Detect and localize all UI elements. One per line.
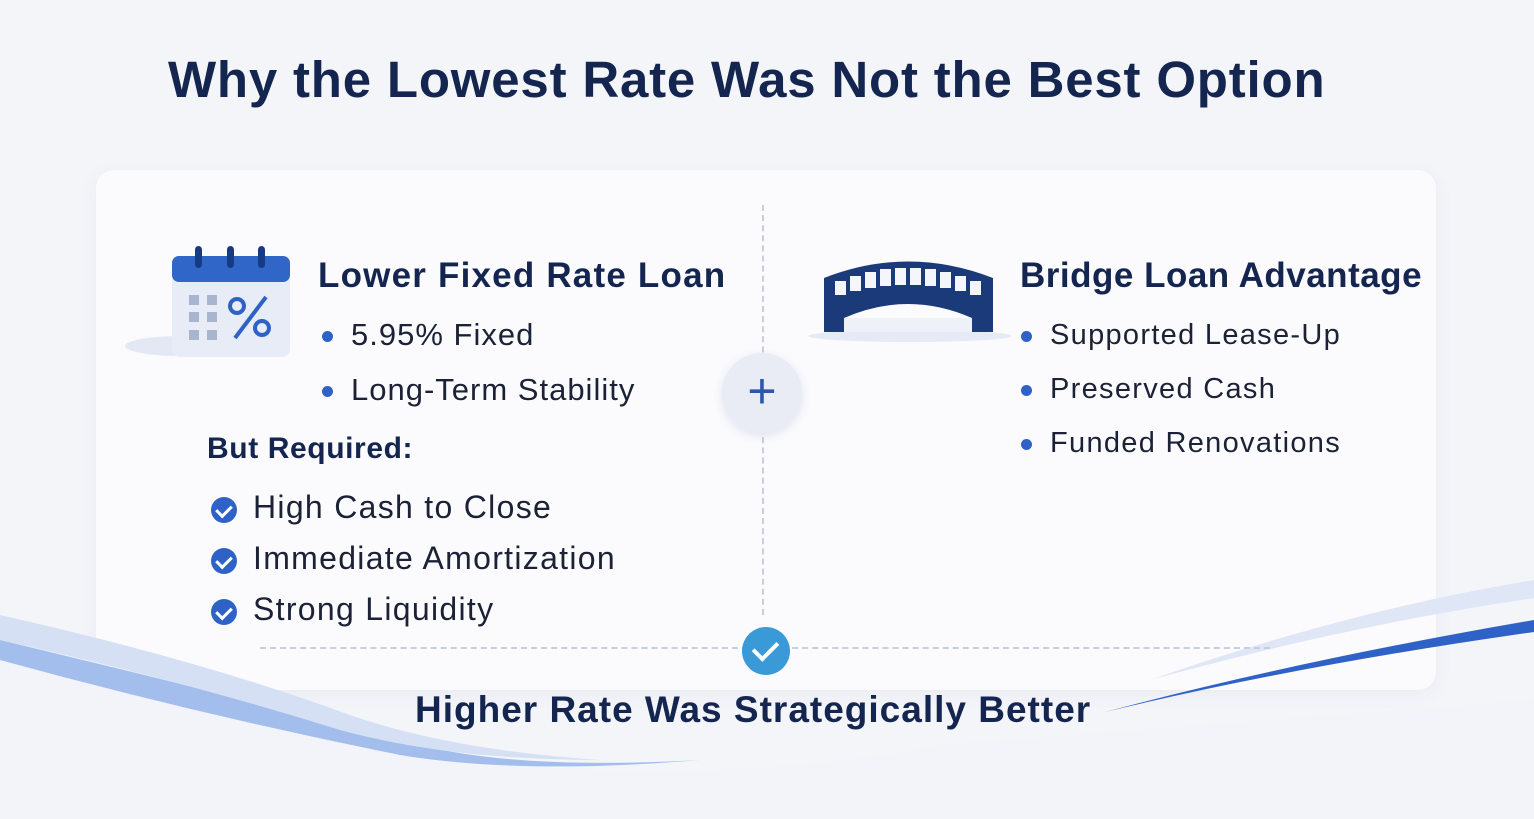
- title: Why the Lowest Rate Was Not the Best Option: [168, 51, 1325, 108]
- list: fixed loan benefits: Long-Term Stability: [351, 372, 635, 407]
- list: bridge benefits: Supported Lease-Up: [1050, 319, 1341, 351]
- horizontal divider: [260, 647, 1270, 649]
- vertical divider: [762, 205, 764, 615]
- icon: plus circle: [722, 353, 802, 433]
- heading: bridge loan advantage: Bridge Loan Advantage: [1020, 256, 1422, 295]
- icon: plus circle: +: [747, 363, 777, 419]
- heading: lower fixed rate loan: Lower Fixed Rate Loan: [318, 256, 726, 295]
- icon: check circle: [742, 627, 790, 675]
- heading: but required: But Required:: [207, 432, 413, 465]
- list: requirements: Strong Liquidity: [253, 591, 494, 627]
- card panel: [96, 170, 1436, 690]
- decorative wave: [0, 580, 1534, 766]
- list: requirements: Immediate Amortization: [253, 540, 616, 576]
- list: requirements: [211, 489, 616, 627]
- icon: bridge: [808, 262, 1012, 342]
- list: fixed loan benefits: [322, 317, 635, 407]
- list: bridge benefits: [1021, 319, 1341, 459]
- conclusion text: Higher Rate Was Strategically Better: [415, 689, 1091, 730]
- list: requirements: High Cash to Close: [253, 489, 552, 525]
- list: bridge benefits: Funded Renovations: [1050, 427, 1341, 459]
- list: fixed loan benefits: 5.95% Fixed: [351, 317, 534, 352]
- icon: calendar: [125, 246, 290, 357]
- list: bridge benefits: Preserved Cash: [1050, 373, 1276, 405]
